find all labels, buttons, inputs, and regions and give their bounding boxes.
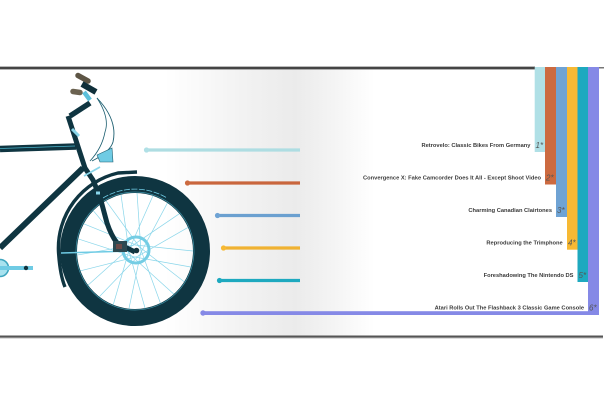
label: item 1 (421, 141, 544, 150)
label: item 4 (486, 238, 576, 248)
label: item 3 (468, 206, 565, 215)
label: item 2: 2* (545, 174, 554, 182)
label: item 5 (484, 271, 587, 280)
label: item 4: 4* (568, 238, 576, 248)
label: item 3: Charming Canadian Clairtones (468, 208, 552, 214)
bar: item 2 (185, 67, 556, 186)
label: item 6: Atari Rolls Out The Flashback 3 Classic Game Console (435, 306, 584, 312)
icon: fender stay (61, 251, 134, 253)
bicycle illustration (0, 76, 202, 318)
label: item 1: Retrovelo: Classic Bikes From Germany (421, 143, 531, 149)
bottom rule (0, 336, 603, 338)
label: item 5: 5* (578, 271, 587, 280)
icon: brake caliper (113, 241, 127, 252)
brake disc (123, 237, 149, 263)
label: item 6: 6* (589, 304, 597, 312)
label: item 4: Reproducing the Trimphone (486, 241, 563, 247)
icon: mudguard (58, 172, 137, 287)
top rule (0, 66, 604, 69)
bar: item 4 (221, 67, 578, 251)
bar: item 6 (200, 67, 599, 316)
background panel (165, 69, 375, 336)
bar: item 1 (144, 67, 545, 153)
label: item 2 (363, 174, 554, 182)
bar: item 3 (215, 67, 567, 218)
icon: brake unit (97, 148, 113, 162)
icon: frame (0, 76, 135, 252)
icon: front wheel (68, 184, 202, 318)
label: item 3: 3* (557, 206, 565, 215)
label: item 1: 1* (536, 141, 544, 150)
label: item 6 (435, 304, 597, 312)
label: item 5: Foreshadowing The Nintendo DS (484, 273, 574, 279)
bar: item 5 (217, 67, 588, 283)
wheel spokes (77, 193, 193, 309)
label: item 2: Convergence X: Fake Camcorder Does It All - Except Shoot Video (363, 176, 542, 182)
icon: crank and chainring (0, 260, 33, 276)
